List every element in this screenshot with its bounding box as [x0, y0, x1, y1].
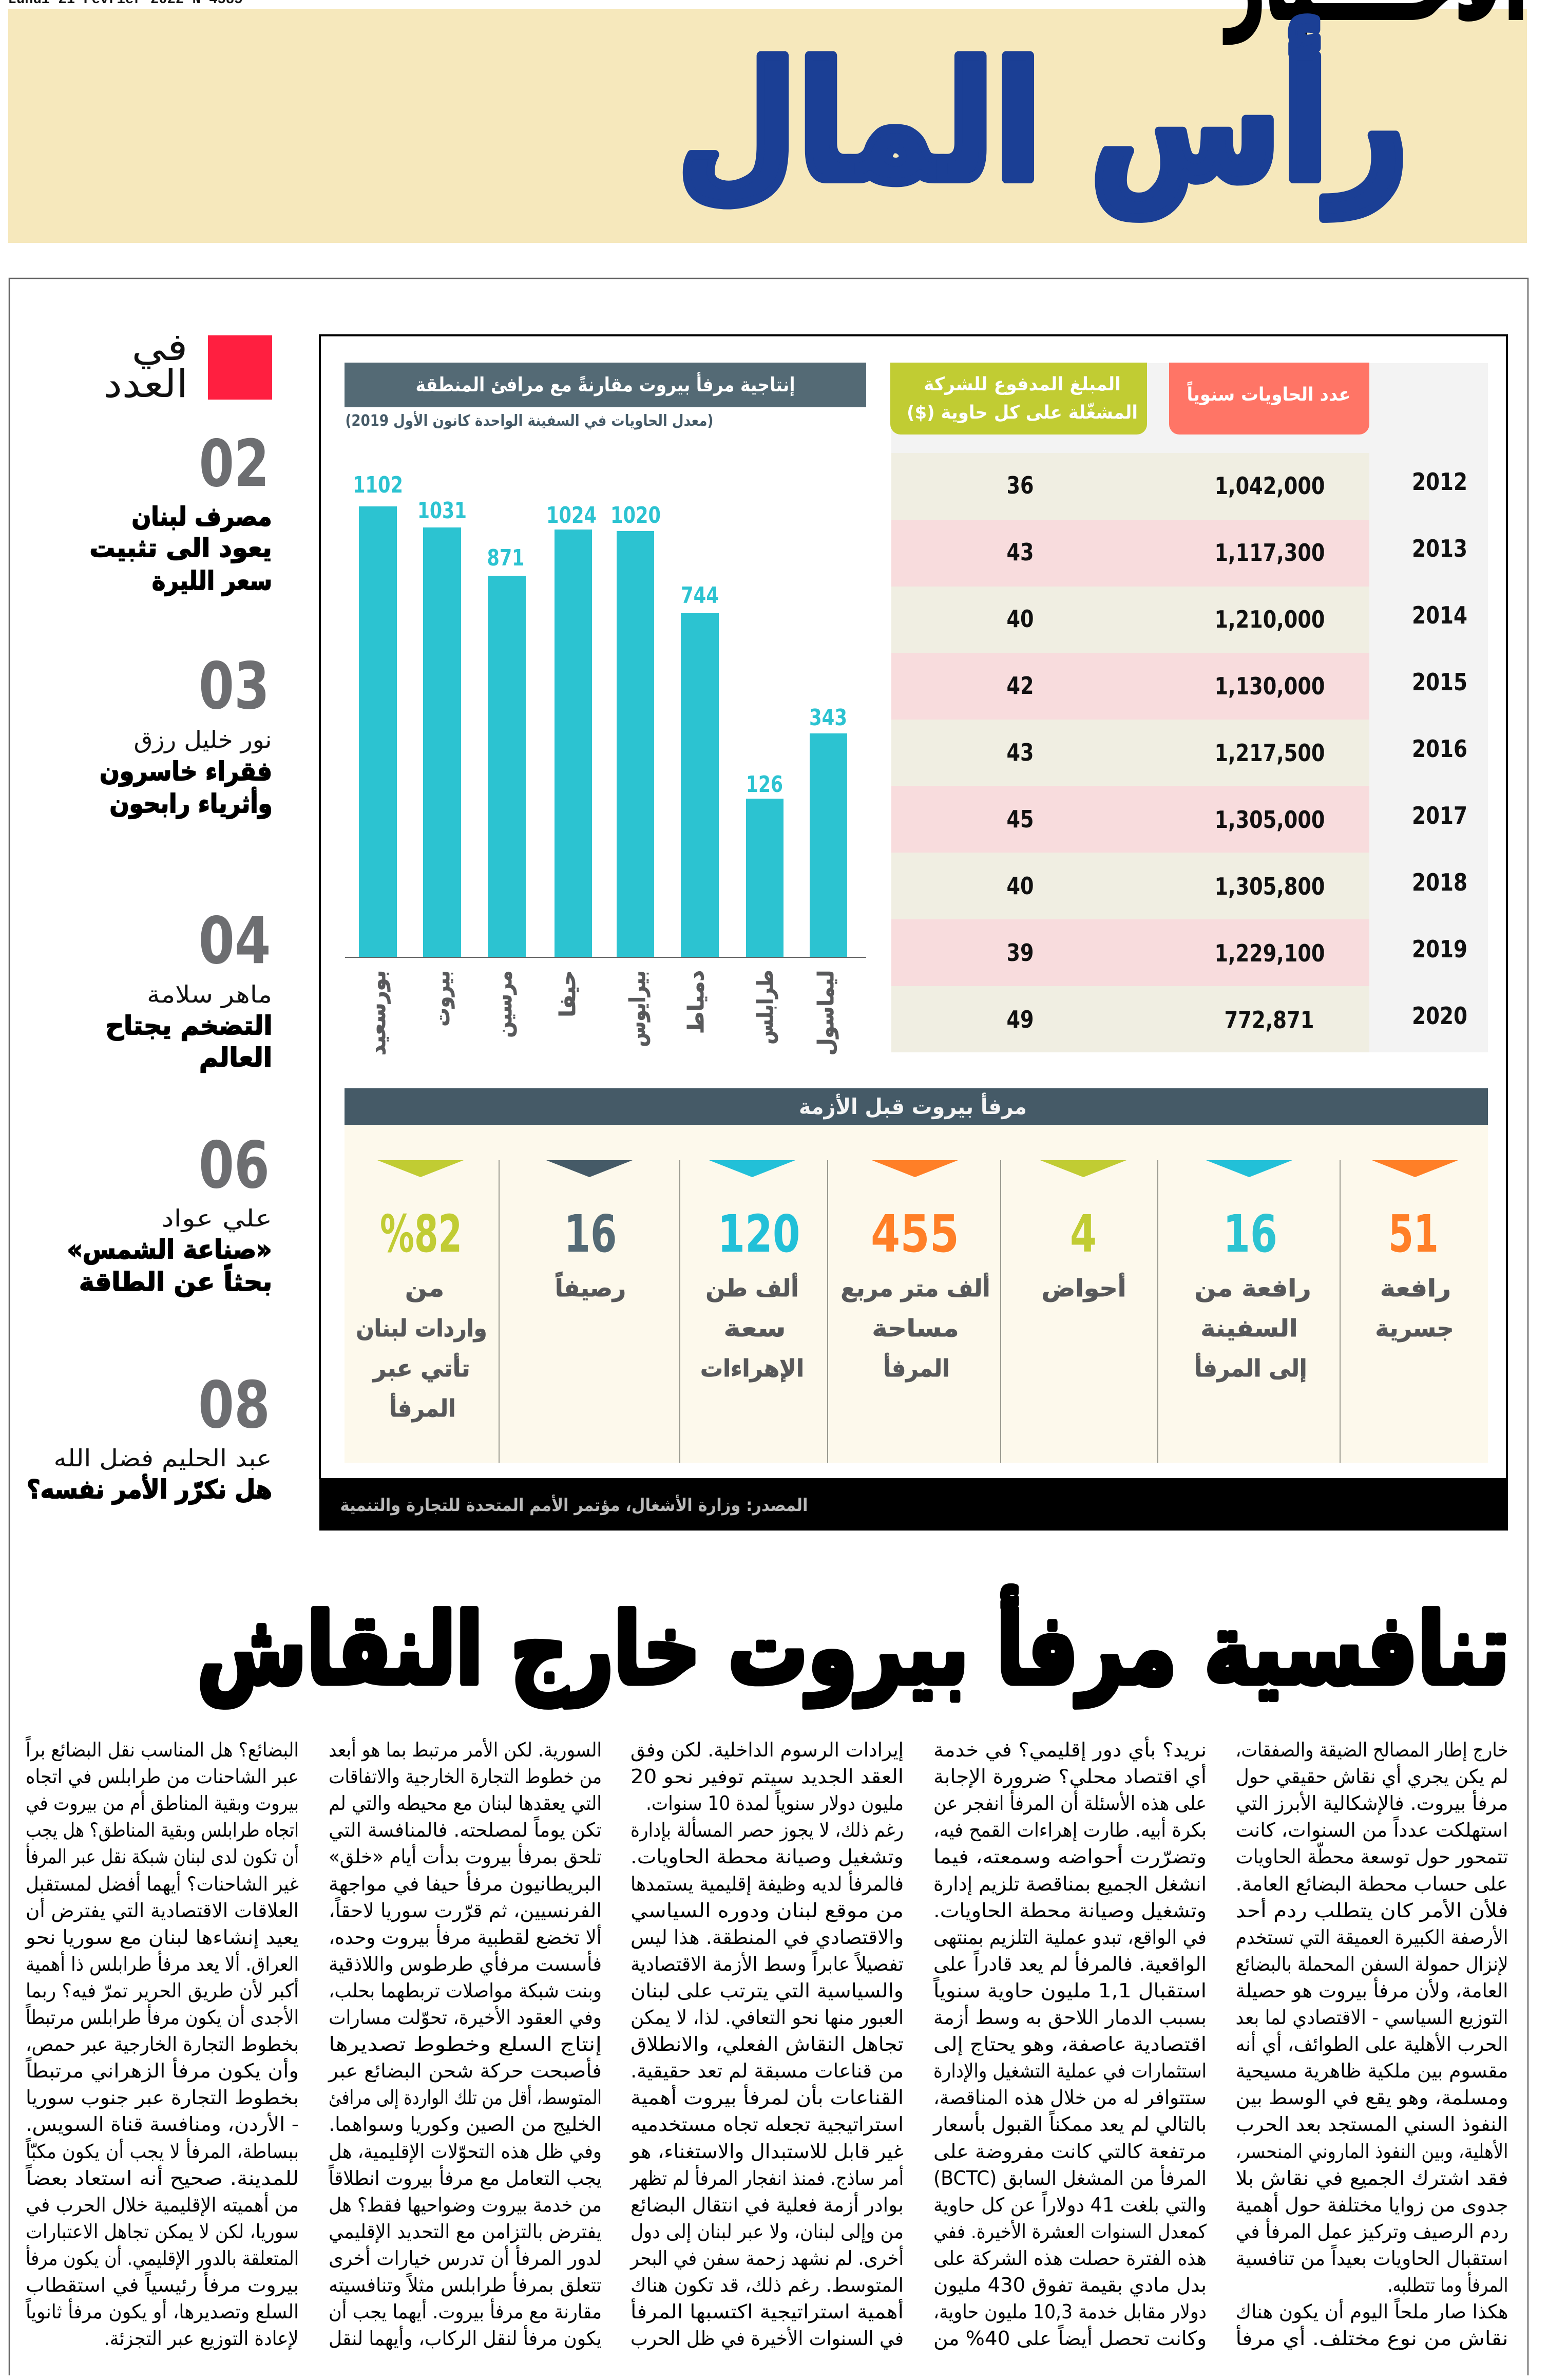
teaser page 03 — [100, 648, 272, 819]
article column 1: مقسوم بين ملكية ظاهرية مسيحية — [1235, 2060, 1508, 2083]
article column 4: يكون مرفأ لنقل الركاب، وأيهما لنقل — [329, 2325, 602, 2350]
teaser page 06: بحثاً عن الطاقة — [79, 1263, 272, 1297]
stat: 120 thousand tons — [700, 1160, 804, 1382]
bar chart: ليماسول — [813, 970, 839, 1055]
article column 2: استثمارات في عملية التشغيل والإدارة — [933, 2060, 1207, 2083]
article column 3: استراتيجية تجعله تجاه مستخدميه — [630, 2113, 904, 2136]
bar chart: بورسعيد — [365, 970, 391, 1055]
data table — [891, 453, 1467, 1052]
article column 5: من أهميته الإقليمية خلال الحرب في — [26, 2192, 299, 2217]
article column 2: وتضرّرت أحواضه وسمعته، فيما — [933, 1844, 1207, 1868]
data table: 49 — [1006, 1006, 1034, 1033]
article column 2: بالتالي لم يعد ممكناً القبول بأسعار — [932, 2110, 1207, 2136]
article column 5: الأجدى أن يكون مرفأ طرابلس مرتبطاً — [26, 2004, 299, 2029]
article column 1: خارج إطار المصالح الضيقة والصفقات، — [1235, 1739, 1508, 1762]
teaser page 08: 08 — [198, 1367, 270, 1443]
article column 5: العلاقات الاقتصادية التي يفترض أن — [26, 1898, 299, 1922]
teaser page 02: سعر الليرة — [152, 566, 272, 596]
article column 2: استقبال 1,1 مليون حاوية سنوياً — [933, 1977, 1207, 2003]
article column 3: تفصيلاً عابراً وسط الأزمة الاقتصادية — [630, 1950, 904, 1976]
bar chart: 126 — [746, 771, 783, 798]
article column 1: العامة، ولأن مرفأ بيروت هو حصيلة — [1235, 1977, 1508, 2003]
article column 1: المرفأ وما تتطلبه. — [1387, 2272, 1508, 2297]
article column 5: أن تكون لدى لبنان شبكة نقل عبر المرفأ — [26, 1843, 299, 1868]
data table: 1,217,500 — [1215, 739, 1325, 767]
article column 5: بيروت مرفأ رئيسياً في استقطاب — [26, 2271, 299, 2297]
data table: 1,117,300 — [1215, 539, 1325, 566]
article column 3: أمر ساذج. فمنذ انفجار المرفأ لم تظهر — [629, 2165, 904, 2190]
article column 1: على حساب محطة البضائع العامة. — [1235, 1873, 1508, 1896]
article column 3: من وإلى لبنان، ولا عبر لبنان إلى دول — [630, 2220, 904, 2243]
stat: 4 basins — [1040, 1160, 1126, 1302]
article column 3: تجاهل النقاش الفعلي، والانطلاق — [630, 2033, 904, 2056]
stat: 455 thousand square metres: 455 — [871, 1204, 959, 1264]
stat: 82 percent of imports: واردات لبنان — [356, 1314, 487, 1342]
article column 2: في الواقع، تبدو عملية التلزيم بمنتهى — [933, 1926, 1207, 1949]
article column 5: بخطوط التجارة الخارجية عبر حمص، — [26, 2033, 299, 2056]
teaser page 04: ماهر سلامة — [147, 980, 272, 1009]
article column 2: دولار مقابل خدمة 10,3 مليون حاوية، — [933, 2300, 1207, 2324]
article column 4: مقارنة مع مرفأ بيروت. أيهما يجب أن — [329, 2298, 602, 2324]
bar chart: 1020 — [610, 502, 661, 528]
teaser page 04: 04 — [198, 903, 271, 978]
article column 5: ببساطة، المرفأ لا يجب أن يكون مكبّاً — [26, 2138, 299, 2163]
stats panel — [345, 1125, 1488, 1463]
article column 4: وفي ظل هذه التحوّلات الإقليمية، هل — [329, 2140, 602, 2163]
article column 5: وأن يكون مرفأ الزهراني مرتبطاً — [26, 2057, 299, 2083]
table header: amount paid: المبلغ المدفوع للشركة — [924, 374, 1121, 395]
stat: 4 basins: 4 — [1070, 1204, 1097, 1264]
article column 1: ومسلمة، وهو يقع في الوسط بين — [1235, 2086, 1508, 2109]
data table: 2017 — [1412, 802, 1467, 829]
data table: 772,871 — [1224, 1006, 1314, 1034]
bar chart: 744 — [681, 582, 719, 609]
data table: 40 — [1006, 605, 1034, 633]
sidebar heading: العدد — [104, 362, 188, 406]
article column 5 — [25, 1736, 299, 2350]
bar chart: طرابلس — [753, 970, 778, 1045]
bar chart: بيرايوس — [625, 971, 651, 1047]
article column 5: عبر الشاحنات من طرابلس في اتجاه — [26, 1765, 299, 1788]
data table: 2016 — [1412, 735, 1467, 763]
article column 1: فقد اشترك الجميع في نقاش بلا — [1235, 2167, 1508, 2190]
teaser page 03: وأثرياء رابحون — [110, 787, 272, 819]
article column 3: فالمرفأ لديه وظيفة إقليمية يستمدها — [630, 1871, 904, 1896]
bar chart: دمياط — [683, 970, 709, 1034]
article column 5: اتجاه طرابلس وبقية المناطق؟ هل يجب — [26, 1819, 299, 1842]
article column 2: مرتفعة كالتي كانت مفروضة على — [933, 2140, 1207, 2163]
article column 2: هذه الفترة حصلت هذه الشركة على — [933, 2247, 1207, 2270]
teaser page 04: العالم — [199, 1043, 272, 1072]
article column 5: أكبر لأن طريق الحرير تمرّ فيه؟ ربما — [26, 1978, 299, 2003]
teaser page 08 — [27, 1367, 272, 1505]
stat: 82 percent of imports: %82 — [380, 1204, 462, 1264]
article column 1: هكذا صار ملحاً اليوم أن يكون هناك — [1235, 2298, 1508, 2324]
article column 2: وتشغيل وصيانة محطة الحاويات. — [933, 1899, 1207, 1922]
stat: 455 thousand square metres — [841, 1160, 990, 1382]
article column 5: السلع وتصديرها، أو يكون مرفأ ثانوياً — [26, 2298, 299, 2324]
article column 5: لإعادة التوزيع عبر التجزئة. — [104, 2327, 299, 2350]
stat: 82 percent of imports — [356, 1160, 487, 1422]
stat: 16 ship to shore cranes — [1194, 1160, 1311, 1383]
article column 5: بيروت وبقية المناطق أم من بيروت في — [26, 1790, 299, 1815]
stat: 4 basins: أحواض — [1041, 1273, 1126, 1302]
stat: 16 quays: رصيفاً — [555, 1272, 626, 1302]
data table: 43 — [1006, 739, 1034, 766]
data table: 2015 — [1412, 668, 1467, 696]
teaser page 02 — [89, 426, 272, 596]
data table: 45 — [1006, 805, 1034, 833]
sidebar: in this issue — [27, 325, 272, 1505]
stat: 455 thousand square metres: ألف متر مربع — [841, 1273, 990, 1302]
article column 4: لدور المرفأ أن تدرس خيارات أخرى — [329, 2245, 602, 2270]
article column 2: بدل مادي بقيمة تفوق 430 مليون — [933, 2274, 1207, 2297]
article column 4 — [328, 1737, 602, 2350]
stat: 120 thousand tons: سعة — [724, 1314, 786, 1342]
article column 4: يفترض بالتزامن مع التحديد الإقليمي — [329, 2220, 602, 2243]
teaser page 08: هل نكرّر الأمر نفسه؟ — [27, 1474, 272, 1505]
article column 1: جدوى من زوايا مختلفة حول أهمية — [1235, 2192, 1508, 2217]
article column 4: تلحق بمرفأ بيروت بدأت أيام «خلق» — [329, 1843, 602, 1868]
teaser page 03: 03 — [199, 648, 270, 724]
article column 1: الأهلية، وبين النفوذ الماروني المنحسر، — [1235, 2139, 1508, 2163]
teaser page 06 — [67, 1127, 272, 1297]
article column 4: إنتاج السلع وخطوط تصديرها — [329, 2033, 602, 2056]
article column 2: الواقعية. فالمرفأ لم يعد قادراً على — [933, 1950, 1207, 1976]
table header: containers per year — [1169, 363, 1369, 435]
bar chart: مرسين — [491, 971, 517, 1037]
article column 5: المتعلقة بالدور الإقليمي. أن يكون مرفأ — [26, 2245, 299, 2270]
article column 1: الحرب الأهلية على الطوائف، أي أنه — [1235, 2031, 1508, 2056]
article column 2: انشغل الجميع بمناقصة تلزيم إدارة — [933, 1873, 1207, 1896]
article column 3: أخرى. لم نشهد زحمة سفن في البحر — [629, 2245, 904, 2270]
article column 2: نريد؟ بأي دور إقليمي؟ في خدمة — [933, 1736, 1207, 1762]
article column 3: العبور منها نحو التعافي. لذا، لا يمكن — [630, 2006, 904, 2029]
teaser page 08: عبد الحليم فضل الله — [53, 1444, 272, 1472]
stat: 51 cranes: رافعة — [1380, 1274, 1451, 1302]
article column 2: المرفأ من المشغل السابق (BCTC) — [933, 2165, 1207, 2190]
teaser page 02: مصرف لبنان — [131, 502, 272, 532]
table background — [891, 363, 1488, 1052]
stat: 120 thousand tons: الإهراءات — [700, 1354, 804, 1382]
port before crisis heading — [345, 1088, 1488, 1125]
article column 5: العراق. ألا يعد مرفأ طرابلس ذا أهمية — [26, 1951, 299, 1976]
data table: 2014 — [1412, 601, 1467, 629]
article column 2: أي اقتصاد محلي؟ ضرورة الإجابة — [933, 1764, 1207, 1788]
article column 1: الأرصفة الكبيرة العميقة التي تستخدم — [1235, 1925, 1508, 1949]
stat: 82 percent of imports: من — [405, 1274, 444, 1302]
article column 4: الفرنسيين، ثم قرّرت سوريا لاحقاً، — [329, 1897, 602, 1922]
bar chart: 343 — [809, 705, 847, 731]
article column 2: وكانت تحصل أيضاً على 40% من — [933, 2325, 1207, 2350]
section title: رأس المال — [677, 17, 1409, 219]
article column 3: والسياسية التي يترتب على لبنان — [630, 1979, 904, 2003]
productivity chart heading — [345, 363, 866, 407]
data table: 2020 — [1412, 1002, 1467, 1030]
bar chart: 1102 — [353, 472, 403, 498]
stat: 51 cranes: 51 — [1388, 1204, 1439, 1264]
stat: 16 ship to shore cranes: السفينة — [1200, 1314, 1298, 1342]
article column 4: يجب التعامل مع مرفأ بيروت انطلاقاً — [329, 2164, 602, 2190]
article column 4: الخليج من الصين وكوريا وسواهما. — [329, 2113, 602, 2136]
chart subtitle: (معدل الحاويات في السفينة الواحدة كانون الأول 2019) — [345, 411, 714, 430]
article column 2: بكرة أبيه. طارت إهراءات القمح فيه، — [933, 1817, 1207, 1842]
article column 4: وبنت شبكة مواصلات تربطهما بحلب، — [329, 1979, 602, 2003]
article column 2: والتي بلغت 41 دولاراً عن كل حاوية — [933, 2191, 1207, 2217]
article column 4: من خطوط التجارة الخارجية والاتفاقات — [329, 1765, 602, 1788]
teaser page 04: التضخم يجتاح — [106, 1011, 272, 1041]
article column 5: للمدينة. صحيح أنه استعاد بعضاً — [26, 2164, 299, 2190]
stat: 82 percent of imports: المرفأ — [389, 1393, 456, 1422]
teaser page 06: 06 — [199, 1127, 270, 1203]
article column 3: والاقتصادي في المنطقة. هذا ليس — [630, 1926, 904, 1949]
data table: 39 — [1006, 939, 1034, 967]
teaser page 02: يعود الى تثبيت — [89, 533, 272, 563]
article column 3: القناعات بأن لمرفأ بيروت أهمية — [630, 2084, 904, 2109]
article column 2: كمعدل السنوات العشرة الأخيرة. ففي — [933, 2219, 1207, 2243]
teaser page 03: فقراء خاسرون — [100, 757, 272, 787]
article column 3: مليون دولار سنوياً لمدة 10 سنوات. — [646, 1789, 904, 1815]
article column 3: بوادر أزمة فعلية في انتقال البضائع — [630, 2192, 904, 2217]
article column 5: بخطوط التجارة عبر جنوب سوريا — [26, 2086, 299, 2109]
data table: 36 — [1006, 471, 1034, 499]
data table: 1,305,000 — [1215, 806, 1325, 834]
article column 1: استهلكت عدداً من السنوات، كانت — [1235, 1816, 1508, 1842]
article column 2: على هذه الأسئلة أن المرفأ انفجر عن — [933, 1790, 1207, 1815]
article column 1: نقاش من نوع مختلف. أي مرفأ — [1235, 2325, 1508, 2350]
article column 4: السورية. لكن الأمر مرتبط بما هو أبعد — [329, 1737, 602, 1762]
table header: containers per year: عدد الحاويات سنوياً — [1187, 381, 1350, 405]
article column 2: بسبب الدمار اللاحق به وسط أزمة — [933, 2005, 1207, 2029]
article column 1: استقبال الحاويات بعيداً من تنافسية — [1235, 2244, 1508, 2270]
article column 3: وتشغيل وصيانة محطة الحاويات. — [630, 1845, 904, 1868]
article column 4: فأسست مرفأي طرطوس واللاذقية — [329, 1951, 602, 1976]
sidebar heading: في — [131, 325, 188, 369]
infographic border — [320, 335, 1507, 1479]
data table: 2012 — [1412, 468, 1467, 496]
article column 3: من موقع لبنان ودوره السياسي — [630, 1899, 904, 1922]
stat: 16 ship to shore cranes: 16 — [1223, 1204, 1277, 1264]
article column 1: تتمحور حول توسعة محطّة الحاويات — [1235, 1842, 1508, 1868]
stat: 51 cranes: جسرية — [1375, 1314, 1454, 1342]
article column 4: تكن يوماً لمصلحته. فالمنافسة التي — [329, 1816, 602, 1842]
stat: 120 thousand tons: 120 — [718, 1204, 800, 1264]
bar chart: 871 — [487, 545, 525, 571]
article column 5: يعيد إنشاءها لبنان مع سوريا نحو — [25, 1926, 299, 1949]
article column 1: ردم الرصيف وتركيز عمل المرفأ في — [1235, 2218, 1508, 2243]
teaser page 02: 02 — [199, 426, 269, 501]
article column 4: من خدمة بيروت وضواحيها فقط؟ هل — [329, 2194, 602, 2217]
article column 1: التوزيع السياسي - الاقتصادي لما بعد — [1235, 2006, 1508, 2029]
data table: 2018 — [1412, 868, 1467, 896]
article column 3: المتوسط. رغم ذلك، قد تكون هناك — [630, 2274, 904, 2297]
stat: 16 ship to shore cranes: إلى المرفأ — [1194, 1353, 1307, 1383]
data table: 1,305,800 — [1215, 873, 1325, 900]
stat: 16 quays: 16 — [564, 1204, 617, 1264]
article column 3: العقد الجديد سيتم توفير نحو 20 — [630, 1765, 904, 1788]
red square — [208, 335, 272, 400]
bar chart: 1031 — [417, 498, 467, 524]
stat: 16 quays — [546, 1160, 633, 1302]
teaser page 04 — [106, 903, 272, 1072]
data table: 1,130,000 — [1215, 672, 1325, 700]
article column 1: لم يكن يجري أي نقاش حقيقي حول — [1235, 1764, 1508, 1788]
stat: 455 thousand square metres: مساحة — [872, 1314, 959, 1342]
bar chart: بيروت — [429, 971, 455, 1026]
bar chart — [345, 472, 866, 1055]
teaser page 03: نور خليل رزق — [133, 726, 272, 754]
data table: 2013 — [1412, 535, 1467, 562]
article column 5: - الأردن، ومنافسة قناة السويس. — [26, 2112, 299, 2136]
article column 4: فأصبحت حركة شحن البضائع عبر — [328, 2057, 602, 2083]
article column 5: سوريا، لكن لا يمكن تجاهل الاعتبارات — [26, 2220, 299, 2243]
article column 2: ستتوافر له من خلال هذه المناقصة، — [933, 2086, 1207, 2109]
data table: 1,229,100 — [1215, 939, 1325, 967]
article column 4: البريطانيون مرفأ حيفا في مواجهة — [329, 1871, 602, 1896]
bar chart: 1024 — [546, 502, 597, 528]
article column 3: في السنوات الأخيرة في ظل الحرب — [630, 2326, 904, 2350]
article column 1: فلأن الأمر كان يتطلب ردم أحد — [1235, 1898, 1508, 1922]
data table: 1,042,000 — [1215, 472, 1325, 500]
stat: 120 thousand tons: ألف طن — [705, 1273, 799, 1302]
article column 4: ألا تخضع لقطبية مرفأ بيروت وحده، — [329, 1924, 602, 1949]
article column 5: غير الشاحنات؟ أيهما أفضل لمستقبل — [26, 1871, 299, 1896]
bar chart: حيفا — [555, 971, 580, 1017]
article column 1: لإنزال حمولة السفن المحملة بالبضائع — [1235, 1953, 1508, 1976]
article column 4: المتوسط، أقل من تلك الواردة إلى مرافئ — [329, 2085, 602, 2109]
article column 3: من قناعات مسبقة لم تعد حقيقية. — [630, 2060, 904, 2083]
port before crisis heading: مرفأ بيروت قبل الأزمة — [799, 1092, 1027, 1120]
data table: 2019 — [1412, 935, 1467, 963]
article column 3: غير قابل للاستبدال والاستغناء، هو — [629, 2140, 904, 2163]
teaser page 06: علي عواد — [161, 1204, 272, 1233]
stat: 82 percent of imports: تأتي عبر — [372, 1353, 470, 1382]
source bar: المصدر: وزارة الأشغال، مؤتمر الأمم المتحدة للتجارة والتنمية — [340, 1494, 808, 1516]
stat: 16 ship to shore cranes: رافعة من — [1194, 1274, 1311, 1302]
header band — [8, 9, 1527, 243]
productivity chart heading: إنتاجية مرفأ بيروت مقارنةً مع مرافئ المنطقة — [416, 372, 795, 396]
table header: amount paid: المشغّلة على كل حاوية ($) — [907, 402, 1138, 423]
article column 4: وفي العقود الأخيرة، تحوّلت مسارات — [329, 2005, 602, 2029]
article column 1: مرفأ بيروت. فالإشكالية الأبرز التي — [1235, 1790, 1508, 1815]
article column 4: تتعلق بمرفأ طرابلس مثلاً وتنافسيته — [329, 2272, 602, 2297]
article column 5: البضائع؟ هل المناسب نقل البضائع براً — [26, 1736, 299, 1762]
article column 1: النفوذ السني المستجد بعد الحرب — [1235, 2113, 1508, 2136]
article column 1 — [1235, 1739, 1508, 2350]
source bar — [319, 1478, 1508, 1531]
stat: 51 cranes — [1372, 1160, 1458, 1342]
article column 2 — [932, 1736, 1207, 2350]
sidebar heading — [104, 325, 188, 406]
article column 4: التي يعقدها لبنان مع محيطه والتي لم — [329, 1792, 602, 1815]
table header: amount paid — [890, 363, 1147, 435]
data table: 42 — [1006, 672, 1034, 700]
infographic panel — [319, 335, 1508, 1531]
teaser page 06: «صناعة الشمس» — [67, 1235, 272, 1264]
article column 3 — [629, 1739, 904, 2350]
data table: 40 — [1006, 872, 1034, 900]
article column 2: اقتصادية عاصفة، وهو يحتاج إلى — [933, 2033, 1207, 2056]
data table: 43 — [1006, 538, 1034, 566]
data table: 1,210,000 — [1215, 606, 1325, 633]
stat: 455 thousand square metres: المرفأ — [883, 1353, 950, 1382]
article column 3: إيرادات الرسوم الداخلية. لكن وفق — [630, 1739, 904, 1762]
article column 3: أهمية استراتيجية اكتسبها المرفأ — [630, 2298, 904, 2324]
article column 3: رغم ذلك، لا يجوز حصر المسألة بإدارة — [630, 1817, 904, 1842]
